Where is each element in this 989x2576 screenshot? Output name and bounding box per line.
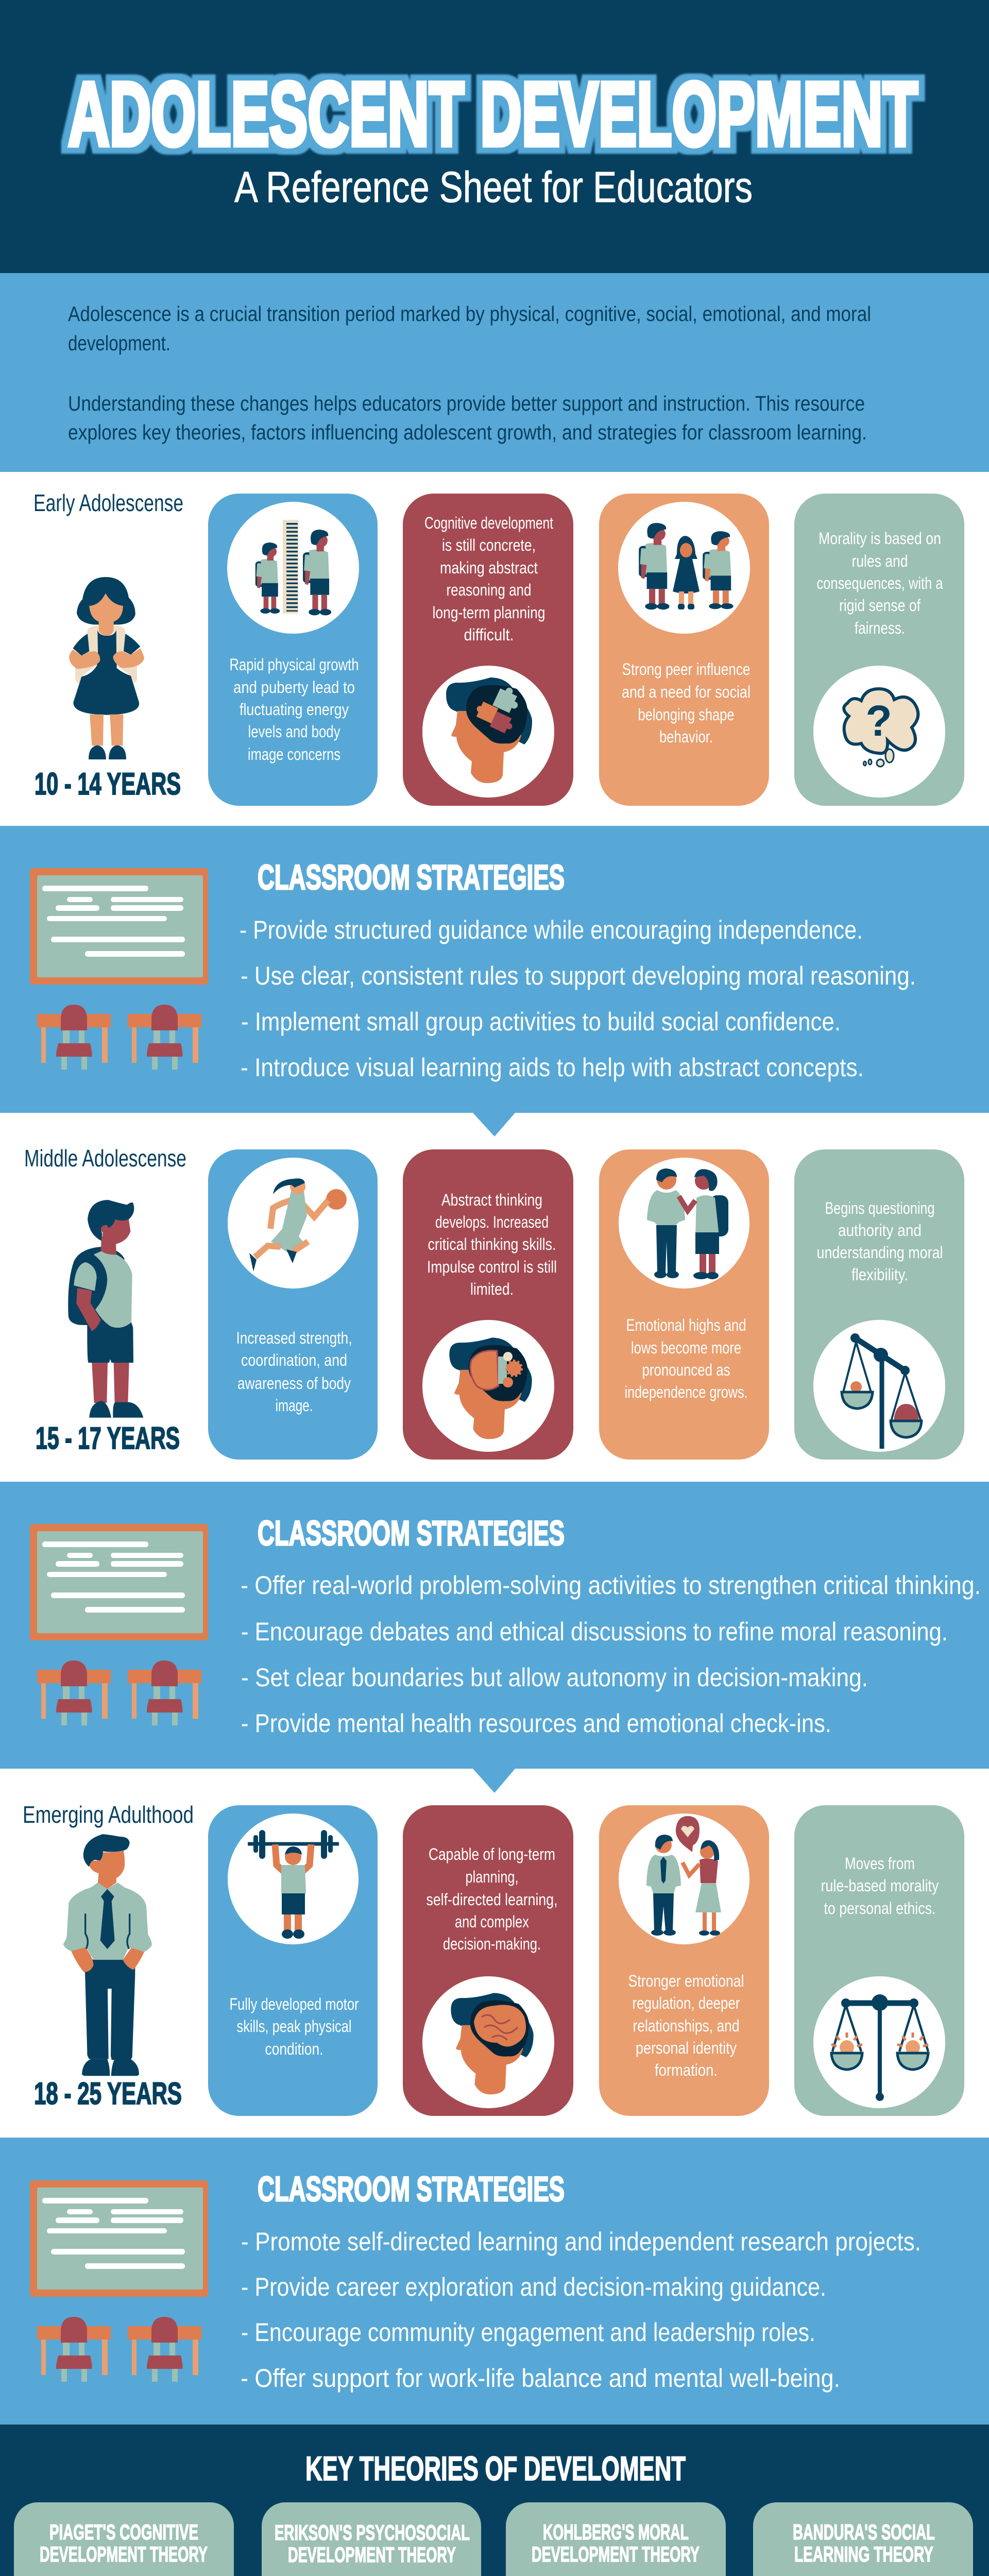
section: middle adolescence	[24, 1145, 964, 1460]
strategy list: - Provide structured guidance while encouraging independence.	[240, 916, 863, 944]
icon: balanced scales	[831, 1994, 928, 2101]
section: early adolescence	[33, 489, 964, 806]
card text: condition.	[265, 2040, 323, 2058]
card text: develops. Increased	[435, 1213, 549, 1231]
stage label: Middle Adolescense	[24, 1145, 186, 1172]
card text	[424, 514, 553, 644]
card text: reasoning and	[446, 581, 532, 599]
card text: self-directed learning,	[427, 1890, 557, 1909]
intro paragraph 2	[68, 392, 867, 444]
age range: 15 - 17 YEARS	[36, 1421, 180, 1455]
card heading: DEVELOPMENT THEORY	[288, 2543, 456, 2567]
card text	[821, 1854, 939, 1918]
card text: making abstract	[440, 558, 538, 577]
card text: and a need for social	[622, 683, 751, 701]
card text: Increased strength,	[236, 1329, 352, 1347]
card text: Cognitive development	[424, 514, 553, 532]
card text: planning,	[466, 1868, 518, 1886]
card: moral	[794, 494, 964, 806]
icon: young man with tie	[63, 1834, 152, 2076]
card: moral	[794, 1805, 964, 2116]
icon: classroom desks	[37, 1660, 201, 1725]
header band	[0, 0, 989, 273]
heading: CLASSROOM STRATEGIES	[258, 1514, 565, 1553]
card text	[230, 1995, 359, 2058]
card: physical	[208, 494, 378, 806]
stage label: Emerging Adulthood	[23, 1801, 194, 1828]
heading: CLASSROOM STRATEGIES	[258, 2170, 565, 2209]
strategy list: - Set clear boundaries but allow autonomy in decision-making.	[241, 1663, 868, 1692]
intro paragraph 1: Adolescence is a crucial transition period marked by physical, cognitive, social, emotional, and moral	[68, 302, 871, 326]
strategy list: - Provide mental health resources and emotional check-ins.	[241, 1709, 831, 1738]
card text: Moves from	[845, 1854, 915, 1873]
strategy list: - Promote self-directed learning and independent research projects.	[241, 2227, 921, 2256]
card text: consequences, with a	[817, 574, 943, 592]
strategy list: - Offer support for work-life balance and mental well-being.	[241, 2364, 840, 2393]
card text: Begins questioning	[825, 1199, 934, 1217]
card text: levels and body	[248, 722, 340, 741]
card text: Capable of long-term	[429, 1845, 555, 1863]
card text: Impulse control is still	[427, 1258, 557, 1276]
card heading: PIAGET'S COGNITIVE	[49, 2520, 198, 2544]
heading: KEY THEORIES OF DEVELOMENT	[305, 2449, 686, 2487]
icon: boy with backpack	[68, 1200, 143, 1418]
card heading: KOHLBERG'S MORAL	[543, 2520, 689, 2544]
card text: image.	[275, 1396, 313, 1415]
card: cognitive	[403, 1805, 573, 2116]
strategy list: - Introduce visual learning aids to help with abstract concepts.	[241, 1053, 864, 1082]
section: emerging adulthood	[23, 1801, 964, 2116]
icon: blackboard	[30, 868, 208, 985]
intro paragraph 1: development.	[68, 331, 170, 355]
card heading: DEVELOPMENT THEORY	[40, 2542, 208, 2566]
card text: critical thinking skills.	[428, 1235, 556, 1253]
card text: skills, peak physical	[237, 2017, 351, 2036]
card text: coordination, and	[241, 1351, 347, 1369]
card text	[624, 1316, 748, 1401]
icon: head with brain and gears	[449, 1337, 532, 1439]
card: cognitive	[403, 1149, 573, 1460]
card: physical	[208, 1149, 378, 1460]
intro paragraph 2: explores key theories, factors influencing adolescent growth, and strategies for classroom learning.	[68, 420, 867, 444]
heading: CLASSROOM STRATEGIES	[258, 858, 565, 897]
card text: awareness of body	[237, 1374, 351, 1393]
card heading	[793, 2520, 935, 2566]
card text: Abstract thinking	[441, 1191, 542, 1209]
card text: decision-making.	[443, 1935, 541, 1953]
card text	[236, 1329, 352, 1415]
icon: two teens talking	[647, 1168, 728, 1279]
card text: Fully developed motor	[230, 1995, 359, 2013]
icon: tilted scales	[842, 1333, 922, 1449]
card text: rules and	[852, 552, 908, 570]
strategy list: - Use clear, consistent rules to support developing moral reasoning.	[241, 961, 916, 990]
card text: rule-based morality	[821, 1876, 939, 1895]
card text: authority and	[838, 1221, 922, 1240]
card: physical	[208, 1805, 378, 2116]
card text: is still concrete,	[442, 536, 536, 554]
panel: classroom strategies 3	[0, 2138, 989, 2425]
card: Erikson	[262, 2502, 481, 2576]
icon: thought cloud: ?	[865, 697, 892, 745]
card text: rigid sense of	[839, 596, 920, 615]
card: Kohlberg	[506, 2502, 726, 2576]
strategy list: - Encourage community engagement and leadership roles.	[241, 2318, 815, 2347]
icon: head with full brain	[451, 1993, 534, 2094]
stage label: Early Adolescense	[33, 489, 183, 516]
card text: Morality is based on	[819, 529, 941, 548]
icon: head with puzzle	[446, 677, 532, 783]
icon: blackboard	[30, 2180, 208, 2297]
card text: difficult.	[464, 625, 514, 644]
card text: behavior.	[659, 727, 713, 746]
card text: regulation, deeper	[633, 1994, 740, 2012]
card text: belonging shape	[638, 705, 735, 724]
card: cognitive	[403, 494, 573, 806]
card heading	[40, 2520, 208, 2566]
card text	[427, 1845, 557, 1953]
card text: and puberty lead to	[233, 678, 355, 697]
card text: relationships, and	[633, 2016, 740, 2035]
card text	[628, 1972, 744, 2079]
card text: formation.	[655, 2061, 718, 2079]
card text: lows become more	[631, 1338, 741, 1357]
icon: height measurement	[255, 520, 331, 615]
card: social	[599, 1149, 769, 1460]
card: Bandura	[753, 2502, 973, 2576]
icon: blackboard	[30, 1524, 208, 1640]
panel: classroom strategies 2	[0, 1482, 989, 1793]
age range: 10 - 14 YEARS	[35, 767, 181, 801]
intro paragraph 1	[68, 302, 871, 355]
card text: Rapid physical growth	[230, 655, 359, 674]
icon: three students	[639, 523, 734, 609]
card text	[427, 1191, 557, 1298]
card text	[817, 1199, 943, 1284]
card text: Emotional highs and	[626, 1316, 746, 1334]
card text: image concerns	[248, 745, 340, 764]
card text: understanding moral	[817, 1243, 943, 1262]
card: social	[599, 1805, 769, 2116]
subtitle: A Reference Sheet for Educators	[234, 163, 753, 211]
card text: and complex	[455, 1912, 529, 1931]
card text: flexibility.	[851, 1265, 908, 1284]
icon: weightlifter	[248, 1830, 339, 1939]
card text: Strong peer influence	[622, 660, 750, 679]
card: Piaget	[14, 2502, 234, 2576]
icon: thought cloud	[844, 689, 918, 767]
card text: independence grows.	[624, 1383, 748, 1401]
card heading	[275, 2520, 470, 2567]
icon: girl with backpack	[69, 577, 144, 759]
strategy list: - Implement small group activities to build social confidence.	[241, 1007, 841, 1036]
icon: couple with heart bubble	[646, 1816, 721, 1936]
strategy list: - Provide career exploration and decision-making guidance.	[241, 2273, 826, 2301]
card text	[230, 655, 359, 764]
strategy list	[241, 1571, 981, 1738]
intro panel	[0, 273, 989, 472]
card heading: DEVELOPMENT THEORY	[532, 2542, 700, 2566]
card text: long-term planning	[433, 603, 545, 622]
strategy list	[240, 916, 916, 1082]
card text: fairness.	[855, 619, 905, 637]
card: social	[599, 494, 769, 806]
card text	[817, 529, 943, 637]
age range: 18 - 25 YEARS	[34, 2076, 182, 2111]
card text: limited.	[470, 1280, 514, 1298]
card text: Stronger emotional	[628, 1972, 744, 1990]
strategy list	[241, 2227, 921, 2393]
card heading	[532, 2520, 700, 2566]
card text: fluctuating energy	[240, 700, 349, 719]
panel: key theories	[0, 2425, 989, 2576]
icon: classroom desks	[37, 2317, 201, 2382]
card text: pronounced as	[642, 1361, 730, 1379]
card text: to personal ethics.	[824, 1899, 935, 1918]
card heading: ERIKSON'S PSYCHOSOCIAL	[275, 2520, 470, 2545]
card text	[622, 660, 751, 746]
icon: classroom desks	[37, 1005, 201, 1070]
panel: classroom strategies 1	[0, 826, 989, 1137]
icon: basketball player	[249, 1178, 347, 1272]
card: moral	[794, 1149, 964, 1460]
card text: personal identity	[636, 2039, 737, 2057]
intro paragraph 2: Understanding these changes helps educators provide better support and instruction. This resource	[68, 392, 865, 415]
